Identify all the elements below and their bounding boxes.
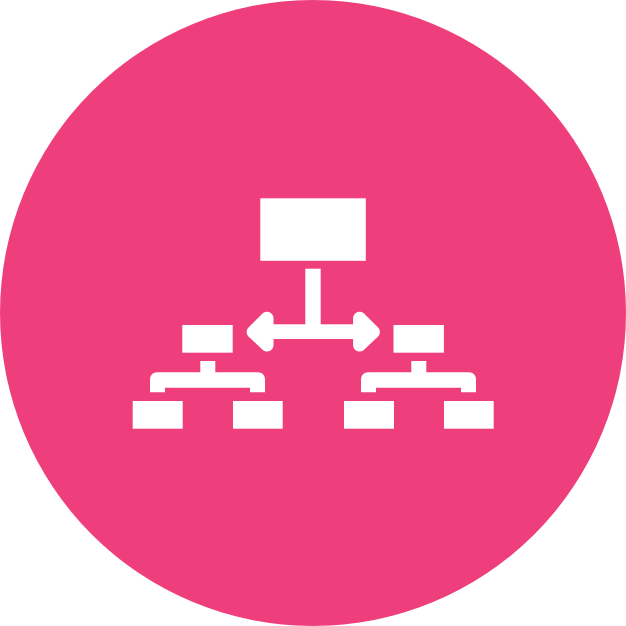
right sub-tree [344,325,494,429]
top node box [260,198,366,261]
double-headed arrow connector [253,269,373,345]
icon: organisation chart [133,198,494,429]
left sub-tree [133,325,283,429]
